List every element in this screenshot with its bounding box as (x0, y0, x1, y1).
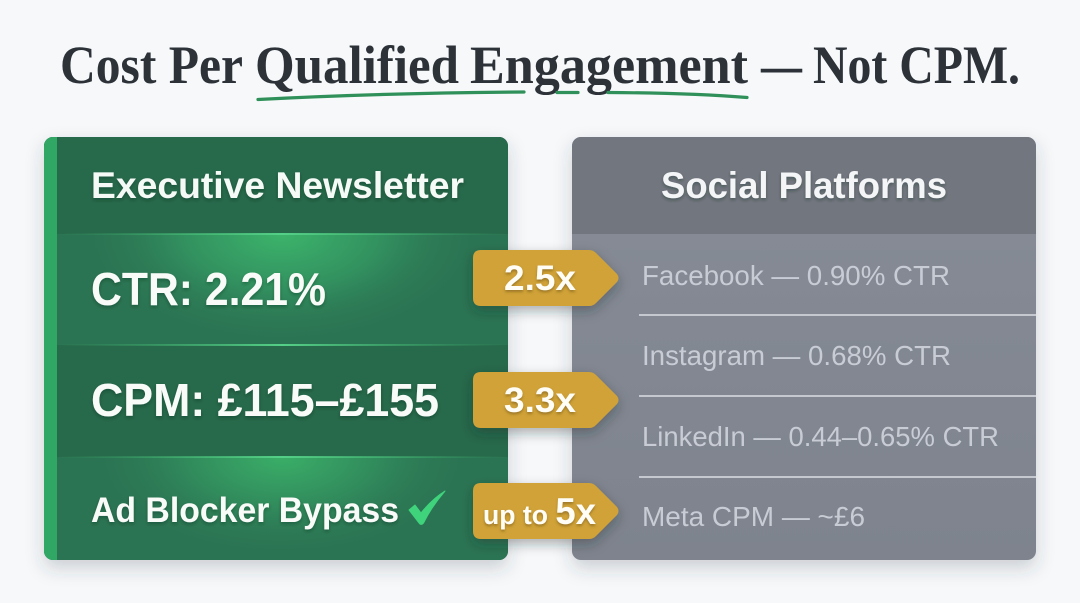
row: instagram: Instagram — 0.68% CTR (642, 340, 951, 371)
metric: CPM: CPM: £115–£155 (91, 374, 439, 426)
row: linkedin: LinkedIn — 0.44–0.65% CTR (642, 421, 999, 452)
row: meta cpm: Meta CPM — ~£6 (642, 501, 865, 532)
metric: CTR: CTR: 2.21% (91, 263, 326, 315)
title underline (258, 92, 747, 100)
heading: social platforms: Social Platforms (661, 165, 947, 206)
title: Qualified (255, 35, 459, 95)
title: Engagement (470, 35, 748, 95)
panel: executive newsletter (44, 137, 508, 560)
badge: 3.3x (473, 372, 618, 428)
title: Cost Per (60, 35, 243, 95)
title (60, 35, 1020, 100)
metric: ad blocker bypass: Ad Blocker Bypass (91, 491, 399, 530)
badge: up to 5x: up to 5x (483, 491, 596, 532)
row: facebook: Facebook — 0.90% CTR (642, 260, 950, 291)
badge: 3.3x: 3.3x (504, 381, 577, 420)
heading: executive newsletter: Executive Newsletter (91, 165, 464, 206)
badge: up to 5x (473, 483, 618, 539)
title: Not CPM. (813, 35, 1020, 95)
icon: check mark (409, 491, 445, 524)
panel: social platforms (572, 137, 1036, 560)
title: — (760, 35, 803, 95)
badge: 2.5x: 2.5x (504, 259, 577, 298)
badge: 2.5x (473, 250, 618, 306)
